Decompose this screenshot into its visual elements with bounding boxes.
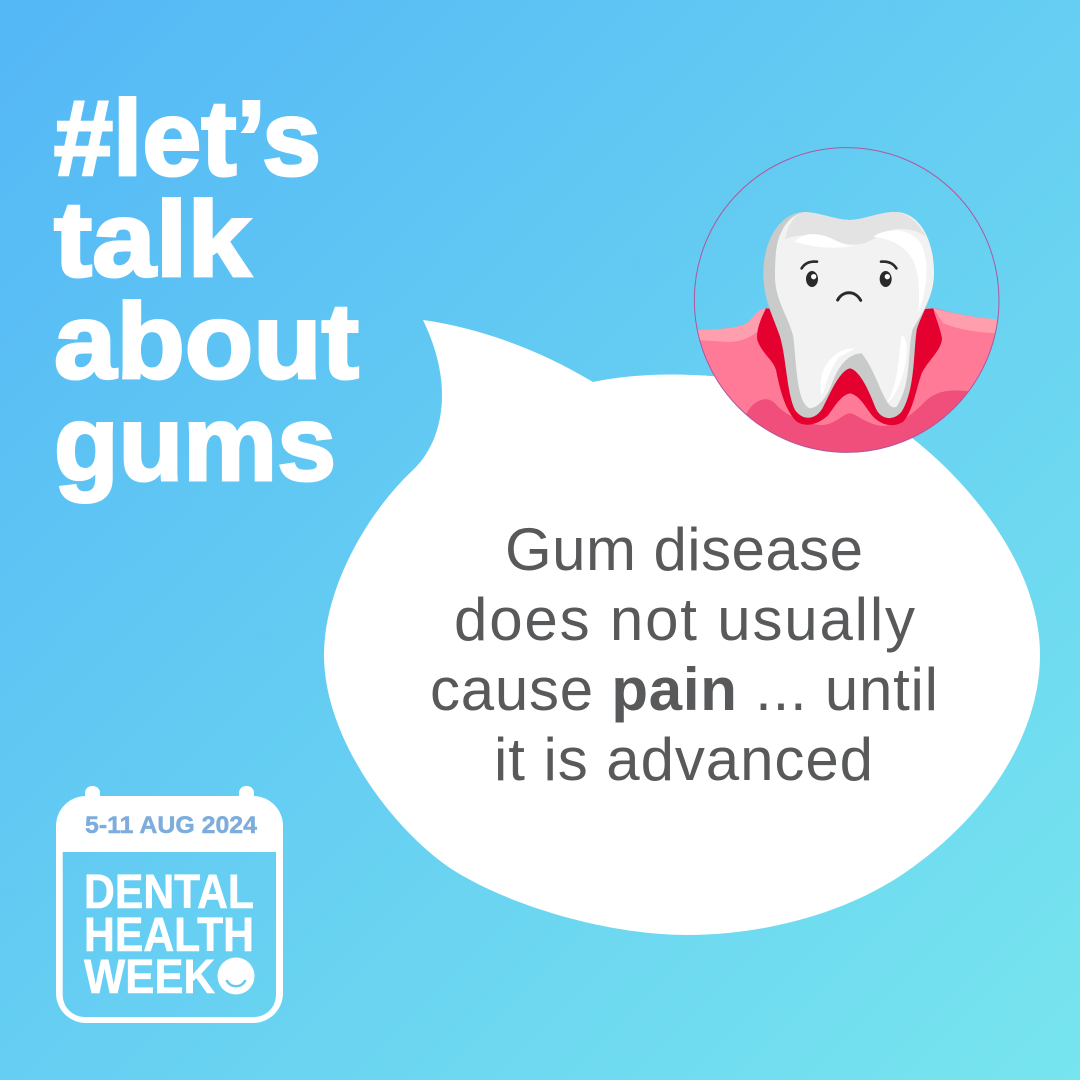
face: left eyebrow <box>802 262 817 268</box>
circle outline <box>694 148 999 452</box>
tooth top shading <box>785 212 926 245</box>
title: #let’s <box>54 78 321 198</box>
bubble message: cause pain ... until <box>430 656 938 723</box>
calendar frame <box>56 796 283 1023</box>
tooth shadow <box>763 212 934 418</box>
bubble message: does not usually <box>454 586 915 653</box>
logo wordmark: DENTAL <box>84 866 254 919</box>
logo wordmark <box>84 866 254 1004</box>
calendar panel <box>63 852 276 1017</box>
title: about <box>54 281 359 401</box>
date: 5-11 AUG 2024 <box>85 812 258 839</box>
face: right eye <box>880 271 892 287</box>
calendar tabs <box>85 786 254 806</box>
face: right eyebrow <box>881 262 896 268</box>
inflamed red gum pocket <box>757 308 942 425</box>
logo: Dental Health Week calendar <box>56 786 283 1023</box>
title: talk <box>54 179 252 299</box>
logo wordmark: HEALTH <box>84 909 254 962</box>
face: sad mouth <box>838 293 861 300</box>
bubble message: Gum disease <box>505 516 863 583</box>
face: left eye <box>806 271 818 287</box>
bubble message <box>430 516 938 793</box>
gum tissue <box>693 308 1000 460</box>
tooth highlights <box>795 230 927 313</box>
smiley <box>218 958 254 994</box>
bubble message: it is advanced <box>494 726 873 793</box>
illustration: sad tooth with inflamed gums <box>693 148 1000 460</box>
title: gums <box>54 383 336 503</box>
speech bubble <box>324 320 1040 935</box>
tooth body <box>775 212 934 408</box>
logo wordmark: WEEK <box>84 951 215 1004</box>
title <box>54 78 359 503</box>
